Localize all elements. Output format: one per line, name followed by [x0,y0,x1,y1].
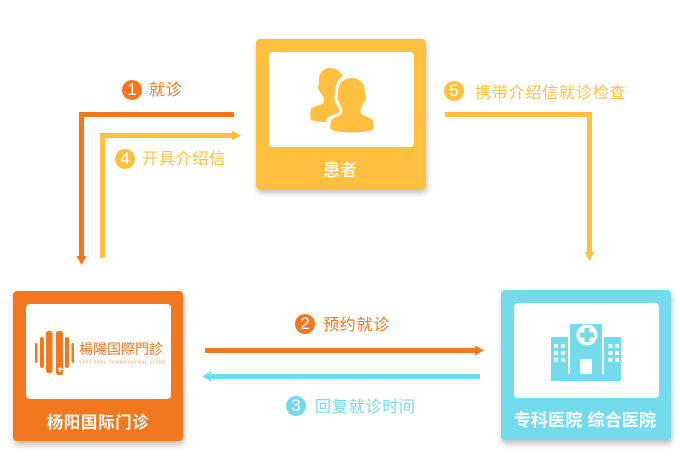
logo: Yang Yang clinic: YANG YANG INTERNATIONAL CLINIC [79,360,167,364]
logo: Yang Yang clinic: 楊陽国際門診 [79,341,163,357]
clinic logo box [26,304,171,399]
clinic title: 杨阳国际门诊 [47,414,149,432]
icon: hospital building [551,324,621,381]
step 1 label: 就诊 [149,82,183,99]
hospital icon box [514,303,659,398]
panel: clinic [13,291,183,441]
step 2 number [295,314,315,334]
step 4 number [115,149,135,169]
step 5 label: 携带介绍信就诊检查 [475,85,626,102]
step 5 number [444,81,464,101]
logo: Yang Yang clinic [35,331,167,375]
patient title: 患者 [323,161,357,180]
step 1 number: 1 [127,80,137,99]
step 4 number: 4 [120,149,130,168]
step 4 label: 开具介绍信 [142,151,226,168]
step 2 number: 2 [300,314,310,333]
patient icon box [269,52,414,147]
panel: hospital [501,290,671,440]
icon: two people [310,68,374,132]
step 1 number [122,80,142,100]
step 3 number: 3 [291,396,301,415]
step 2 label: 预约就诊 [323,317,390,334]
step 3 label: 回复就诊时间 [315,399,416,416]
step 5 number: 5 [449,81,459,100]
step 3 number [286,396,306,416]
panel: patient [256,39,426,189]
hospital title: 专科医院 综合医院 [514,411,656,430]
